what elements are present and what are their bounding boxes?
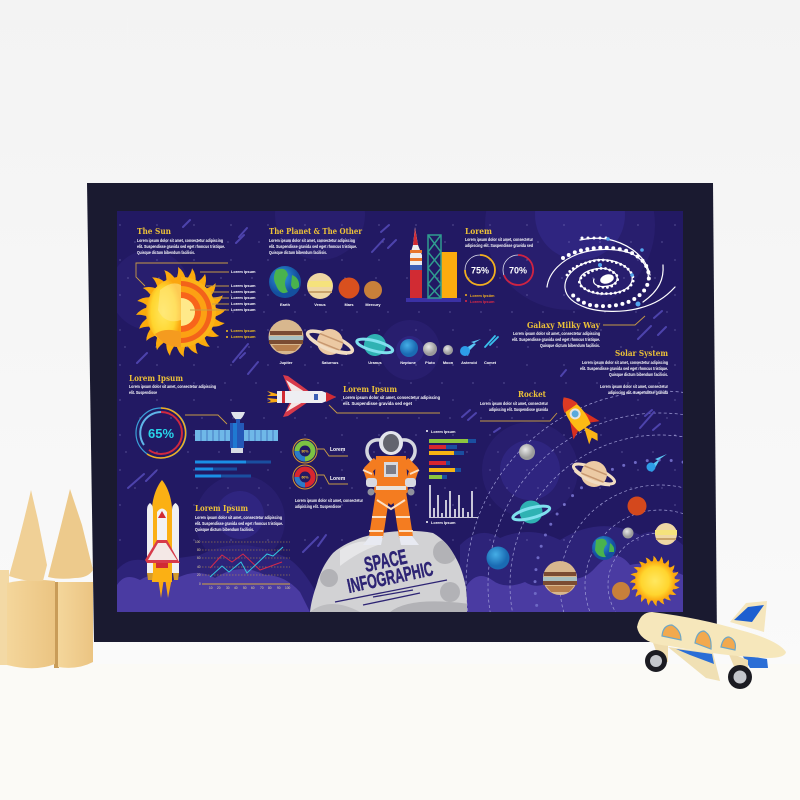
title underlines	[335, 580, 447, 605]
labels: sun layers	[226, 269, 256, 339]
text: galaxy description: Lorem ipsum dolor sit amet, consectetur adipiscing	[513, 331, 600, 336]
section: lorem ipsum chart	[195, 504, 291, 590]
line chart: 60	[197, 556, 201, 560]
text: description: elit. Suspendisse	[129, 390, 157, 395]
gauge: 75%: 75%	[471, 266, 489, 276]
text: planets description	[269, 238, 357, 255]
labels: planets: Moon	[443, 360, 454, 365]
orbits	[466, 390, 683, 612]
donut: green: 80%	[301, 450, 309, 454]
line chart: 80	[268, 586, 272, 590]
labels: planets: Asteroid	[461, 360, 478, 365]
planet: neptune	[400, 339, 418, 357]
text: solar system description: Quisque dictum bibendum facilisis.	[609, 372, 668, 377]
labels: planets: Uranus	[368, 360, 382, 365]
text: lorem description: adipiscing elit. Suspendisse gravida sed	[465, 243, 533, 248]
labels: sun layers: Lorem ipsum	[231, 301, 256, 306]
boots	[363, 536, 419, 545]
section: lorem ipsum gauge and satellite	[129, 374, 278, 478]
line chart: 100	[285, 586, 291, 590]
text: description	[343, 395, 440, 406]
labels: sun layers: Lorem ipsum	[231, 334, 256, 339]
text: solar system description: Lorem ipsum dolor sit amet, consectetur	[600, 384, 668, 389]
donut: red: 60%	[301, 476, 309, 480]
planet: mars	[338, 278, 360, 298]
callouts: donuts: Lorem	[330, 447, 346, 453]
heading: rocket: Rocket	[518, 390, 546, 400]
legend: Lorem Ipsum	[431, 520, 456, 525]
toy airplane	[637, 601, 786, 689]
planet: jupiter	[268, 320, 304, 354]
text: planets description: elit. Suspendisse gravida sed eget rhoncus tristique.	[269, 244, 357, 249]
clouds	[117, 556, 683, 612]
text: rocket description: Lorem ipsum dolor sit amet, consectetur	[480, 401, 548, 406]
heading: lorem ipsum: Lorem Ipsum	[195, 504, 248, 514]
planet: uranus	[510, 496, 552, 528]
text: rocket description: adipiscing elit. Suspendisse gravida	[489, 407, 548, 412]
legs	[376, 492, 406, 537]
cone: right	[48, 489, 93, 579]
legend: gauges: Lorem Ipsum	[470, 293, 495, 298]
asteroid belt	[534, 458, 683, 607]
callouts: donuts: Lorem	[330, 476, 346, 482]
horizontal bars	[429, 439, 476, 479]
callout line	[329, 405, 440, 413]
line chart	[195, 540, 291, 590]
section: lorem ipsum shuttle	[329, 385, 440, 413]
gloves and tools	[366, 478, 416, 496]
line chart: 50	[243, 586, 247, 590]
icon: satellite	[195, 412, 278, 453]
cone: left	[9, 490, 47, 581]
illustration: flying rocket	[551, 388, 608, 452]
illustration: big rocket	[145, 480, 180, 598]
text: galaxy description: elit. Suspendisse gravida sed eget rhoncus tristique.	[512, 337, 600, 342]
backpack ring	[367, 440, 415, 464]
heading: solar system: Solar System	[615, 349, 668, 359]
illustration: moon	[310, 531, 470, 615]
callout line: satellite	[185, 415, 227, 424]
planet: mercury	[364, 281, 382, 299]
nebula backdrop	[117, 211, 655, 551]
text: description: Quisque dictum bibendum facilisis.	[195, 527, 254, 532]
illustration: space shuttle	[267, 375, 336, 417]
illustration: launch tower	[406, 227, 461, 302]
line chart: 20	[197, 573, 201, 577]
labels: planets: Neptune	[400, 360, 417, 365]
labels: planets	[280, 302, 497, 365]
stars	[120, 225, 680, 540]
heading: the planet and the other: The Planet & The Other	[269, 227, 362, 237]
labels: planets: Mars	[344, 302, 354, 307]
labels: sun layers: Lorem ipsum	[231, 289, 256, 294]
tail	[730, 601, 767, 632]
text: description: elit. Suspendisse gravida sed eget rhoncus tristique.	[195, 521, 283, 526]
labels: planets: Pluto	[425, 360, 435, 365]
line chart: 80	[197, 548, 201, 552]
bars: satellite data	[195, 460, 271, 478]
table surface	[0, 664, 800, 800]
planet: saturn	[303, 321, 357, 363]
icon: sun	[630, 556, 680, 606]
labels: sun layers: Lorem ipsum	[231, 295, 256, 300]
labels: planets: Mercury	[365, 302, 381, 307]
planet: earth	[592, 536, 616, 560]
wheels	[645, 650, 752, 689]
text: sun description: Quisque dictum bibendum facilisis.	[137, 250, 195, 255]
gauge: 70%: 70%	[509, 266, 527, 276]
illustration: astronaut	[363, 431, 419, 545]
text: description	[129, 384, 216, 395]
text: description: Lorem ipsum dolor sit amet, consectetur adipiscing	[195, 515, 282, 520]
column chart	[429, 485, 478, 518]
planet: mars	[628, 496, 646, 516]
text: solar system description: Lorem ipsum dolor sit amet, consectetur adipiscing	[582, 360, 668, 365]
line chart: 70	[260, 586, 264, 590]
donut charts	[293, 439, 363, 509]
cylinder: left	[7, 580, 55, 668]
labels: planets: Saturnus	[322, 360, 338, 365]
block: far left	[0, 570, 9, 665]
meteors	[128, 220, 666, 552]
line chart: 40	[197, 565, 201, 569]
planet: mercury	[612, 582, 630, 600]
planet: moon	[622, 528, 634, 538]
suit torso	[374, 456, 408, 505]
text: rocket description	[480, 401, 548, 412]
text: galaxy description: Quisque dictum bibendum facilisis.	[540, 343, 600, 348]
text: lorem description: Lorem ipsum dolor sit amet, consectetur	[465, 237, 533, 242]
text: galaxy description	[512, 331, 600, 348]
illustration: milky way galaxy	[547, 237, 675, 311]
text: description: Lorem ipsum dolor sit amet, consectetur adipiscing	[343, 395, 440, 400]
labels: sun layers: Lorem ipsum	[231, 307, 256, 312]
planet: neptune	[486, 546, 510, 570]
helmet	[379, 431, 403, 455]
title: space infographic: INFOGRAPHIC	[345, 558, 435, 598]
callouts: donuts	[317, 447, 348, 484]
text: solar system description: elit. Suspendisse gravida sed eget rhoncus tristique.	[580, 366, 668, 371]
callout line: galaxy	[603, 316, 645, 325]
title: space infographic: SPACE	[362, 545, 409, 577]
text: sun description	[137, 238, 225, 255]
struts	[652, 640, 748, 676]
icon: asteroid	[460, 339, 481, 356]
section: bar charts right of astronaut	[426, 429, 478, 525]
poster	[117, 211, 683, 612]
text: solar system description: adipiscing elit. Suspendisse gravida	[608, 390, 668, 395]
callout line: rocket	[480, 413, 557, 421]
section: galaxy milky way	[512, 316, 645, 348]
labels: sun layers: Lorem ipsum	[231, 328, 256, 333]
line chart: 60	[251, 586, 255, 590]
gauge: 65%	[136, 408, 186, 458]
text: sun description: elit. Suspendisse gravida sed eget rhoncus tristique.	[137, 244, 225, 249]
planet: venus	[655, 523, 677, 545]
icon: comets	[485, 336, 498, 347]
planet: earth	[269, 266, 301, 298]
labels: planets: Jupiter	[280, 360, 293, 365]
heading: galaxy milky way: Galaxy Milky Way	[527, 321, 601, 331]
text: planets description: Quisque dictum bibendum facilisis.	[269, 250, 327, 255]
planet: moon	[443, 345, 453, 355]
text: donut description	[295, 498, 363, 509]
line chart: 90	[277, 586, 281, 590]
planet: saturn	[569, 454, 619, 494]
section: the sun	[136, 227, 256, 357]
planet: uranus	[354, 330, 396, 360]
picture frame	[87, 183, 717, 642]
line chart: 20	[217, 586, 221, 590]
heading: lorem ipsum: Lorem Ipsum	[129, 374, 183, 384]
text: donut description: Lorem ipsum dolor sit amet, consectetur	[295, 498, 363, 503]
section: planets	[268, 227, 498, 365]
text: planets description: Lorem ipsum dolor sit amet, consectetur adipiscing	[269, 238, 355, 243]
legend: gauges: Lorem Ipsum	[470, 299, 495, 304]
title: space infographic	[345, 545, 435, 598]
fuselage	[637, 612, 786, 658]
text: sun description: Lorem ipsum dolor sit amet, consectetur adipiscing	[137, 238, 223, 243]
right wing	[742, 655, 768, 668]
line chart: 40	[234, 586, 238, 590]
labels: planets: Earth	[280, 302, 291, 307]
labels: planets: Comet	[484, 360, 497, 365]
planet: pluto	[423, 342, 437, 356]
legend: gauges	[465, 293, 495, 304]
line chart: 100	[195, 540, 201, 544]
heading: the sun: The Sun	[137, 227, 171, 237]
cylinder: right	[58, 582, 93, 668]
planet: jupiter	[543, 561, 577, 595]
icon: sun cross section	[136, 267, 226, 357]
line chart: 10	[209, 586, 213, 590]
gauge: 65%: 65%	[148, 426, 174, 441]
planet: venus	[307, 273, 333, 299]
section: rocket	[480, 390, 557, 421]
wooden blocks	[0, 489, 93, 668]
labels: sun layers: Lorem ipsum	[231, 283, 256, 288]
text: description: elit. Suspendisse gravida sed eget	[343, 401, 413, 406]
section: lorem gauges	[465, 227, 533, 304]
heading: lorem: Lorem	[465, 227, 492, 237]
legend: Lorem Ipsum	[431, 429, 456, 434]
icon: comet	[646, 454, 667, 472]
text: solar system description	[580, 360, 668, 395]
planet: pluto	[519, 444, 535, 460]
labels: sun layers: Lorem ipsum	[231, 269, 256, 274]
labels: planets: Venus	[314, 302, 326, 307]
gap shadow	[54, 582, 59, 668]
text: description: Lorem ipsum dolor sit amet, consectetur adipiscing	[129, 384, 216, 389]
windows	[662, 625, 735, 650]
solar system bodies	[486, 444, 680, 606]
near wing	[668, 647, 720, 681]
text: donut description: adipiscing elit. Suspendisse	[295, 504, 341, 509]
arms	[368, 461, 414, 482]
text: lorem description	[465, 237, 533, 248]
line chart: 30	[226, 586, 230, 590]
callout lines: sun	[136, 263, 229, 310]
heading: lorem ipsum: Lorem Ipsum	[343, 385, 397, 395]
section: solar system	[580, 349, 668, 395]
line chart: 0	[199, 582, 201, 586]
clouds back layer	[117, 526, 683, 612]
text: description	[195, 515, 283, 532]
